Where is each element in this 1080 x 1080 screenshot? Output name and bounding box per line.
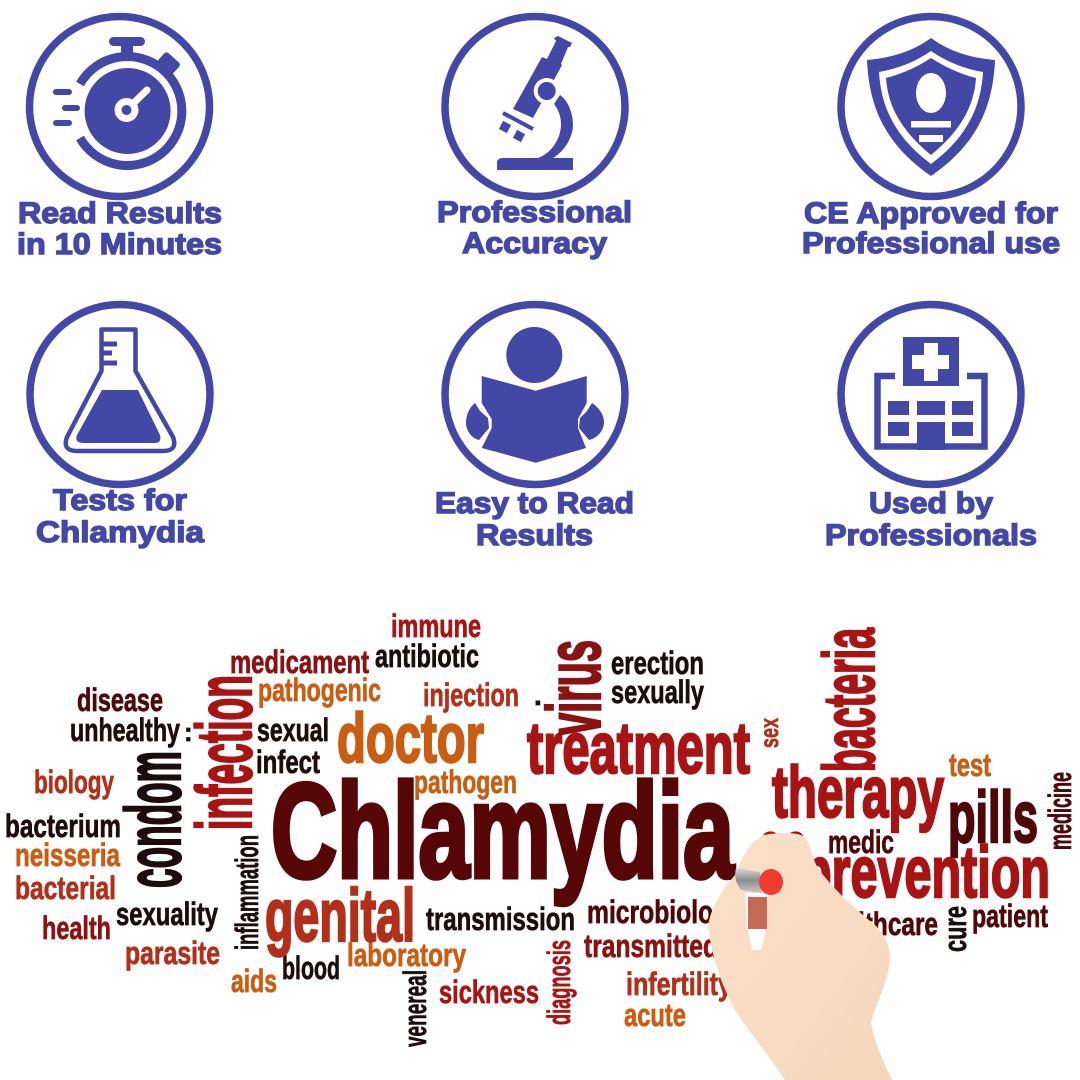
word cloud: chlamydia terms: diagnosis [541,940,577,1025]
label: Tests for Chlamydia [36,484,204,549]
word cloud: chlamydia terms: biology [34,764,114,800]
label: Used by Professionals: Used by [869,487,993,520]
icon: microscope [445,16,625,196]
icon: stopwatch [30,16,210,196]
label: CE Approved for Professional use: Professional use [802,227,1060,260]
word cloud: chlamydia terms: transmitted [584,928,718,964]
label: Tests for Chlamydia: Chlamydia [36,516,204,549]
word cloud: chlamydia terms: sexually [611,674,704,710]
panel: used by professionals [825,304,1037,552]
label: Professional Accuracy: Professional [437,196,632,229]
word cloud: chlamydia terms: genital [265,874,415,957]
word cloud: chlamydia terms: acute [624,997,686,1033]
word cloud: chlamydia terms: medic [828,824,894,860]
label: CE Approved for Professional use: CE Approved for [804,197,1058,230]
label: Easy to Read Results: Results [476,519,593,552]
word cloud: chlamydia terms [5,608,1078,1047]
word cloud: chlamydia terms: venereal [397,970,433,1047]
word cloud: chlamydia terms: bacteria [810,628,890,772]
word cloud: chlamydia terms: pathogen [414,764,517,800]
word cloud: chlamydia terms: test [949,747,991,783]
word cloud: chlamydia terms: sickness [439,974,539,1010]
word cloud: chlamydia terms: transmission [426,901,575,937]
word cloud: chlamydia terms: medicine [1042,772,1078,850]
word cloud: chlamydia terms: . [534,680,542,711]
word cloud: chlamydia terms: health [42,910,111,946]
label: Used by Professionals: Professionals [825,519,1037,552]
word cloud: chlamydia terms: aids [231,963,277,999]
word cloud: chlamydia terms: : [184,717,193,747]
icon: hospital [841,304,1021,484]
word: Chlamydia: Chlamydia [271,757,735,906]
word cloud: chlamydia terms: sex [754,718,784,748]
word cloud: chlamydia terms: blood [282,950,340,986]
word cloud: chlamydia terms: bacterium [5,808,121,844]
word cloud: chlamydia terms: erection [611,645,704,681]
word cloud: chlamydia terms: sexuality [116,896,218,932]
label: Tests for Chlamydia: Tests for [53,484,187,517]
label: Professional Accuracy: Accuracy [462,227,607,260]
word cloud: chlamydia terms: condom [109,751,197,888]
label: Read Results in 10 Minutes: Read Results [18,197,222,230]
image: hand holding red marker [708,833,892,1080]
panel: tests for chlamydia [30,304,210,549]
word cloud: chlamydia terms: doctor [337,699,484,777]
label: Easy to Read Results: Easy to Read [435,487,634,520]
word cloud: chlamydia terms: parasite [125,935,220,971]
label: Easy to Read Results [435,487,634,552]
word cloud: chlamydia terms: treatment [527,709,750,789]
word cloud: chlamydia terms: unhealthy [70,712,180,748]
word cloud: chlamydia terms: virus [532,640,617,735]
word cloud: chlamydia terms: infect [256,744,320,780]
panel: professional accuracy [437,16,632,260]
word cloud: chlamydia terms: healthcare [816,906,938,942]
word cloud: chlamydia terms: microbiology [587,894,742,930]
word cloud: chlamydia terms: therapy [772,753,944,833]
label: Read Results in 10 Minutes: in 10 Minutes [17,228,222,261]
panel: easy to read results [435,304,634,552]
label: Used by Professionals [825,487,1037,552]
icon: shield [841,16,1021,196]
word cloud: chlamydia terms: sexual [257,712,329,748]
word cloud: chlamydia terms: laboratory [347,937,466,973]
panel: read results in 10 minutes [17,16,222,261]
word cloud: chlamydia terms: neisseria [15,837,120,873]
word cloud: chlamydia terms: bacterial [15,870,116,906]
word cloud: chlamydia terms: pathogenic [258,672,381,708]
icon: person reading [445,304,625,484]
word cloud: chlamydia terms: infertility [626,966,732,1002]
word cloud: chlamydia terms: antibiotic [375,638,479,674]
word cloud: chlamydia terms: infection [180,675,268,830]
word cloud: chlamydia terms: immune [391,608,481,644]
word cloud: chlamydia terms: medicament [230,644,369,680]
word cloud: chlamydia terms: cure [937,906,973,952]
label: CE Approved for Professional use [802,197,1060,260]
label: Read Results in 10 Minutes [17,197,222,261]
word cloud: chlamydia terms: patient [972,898,1048,934]
word cloud: chlamydia terms: inflammation [229,835,265,950]
panel: CE approved [802,16,1060,260]
word cloud: chlamydia terms: disease [77,682,163,718]
word cloud: chlamydia terms: injection [423,677,519,713]
icon: flask [30,304,210,484]
word cloud: chlamydia terms: ss [758,800,808,902]
label: Professional Accuracy [437,196,632,260]
